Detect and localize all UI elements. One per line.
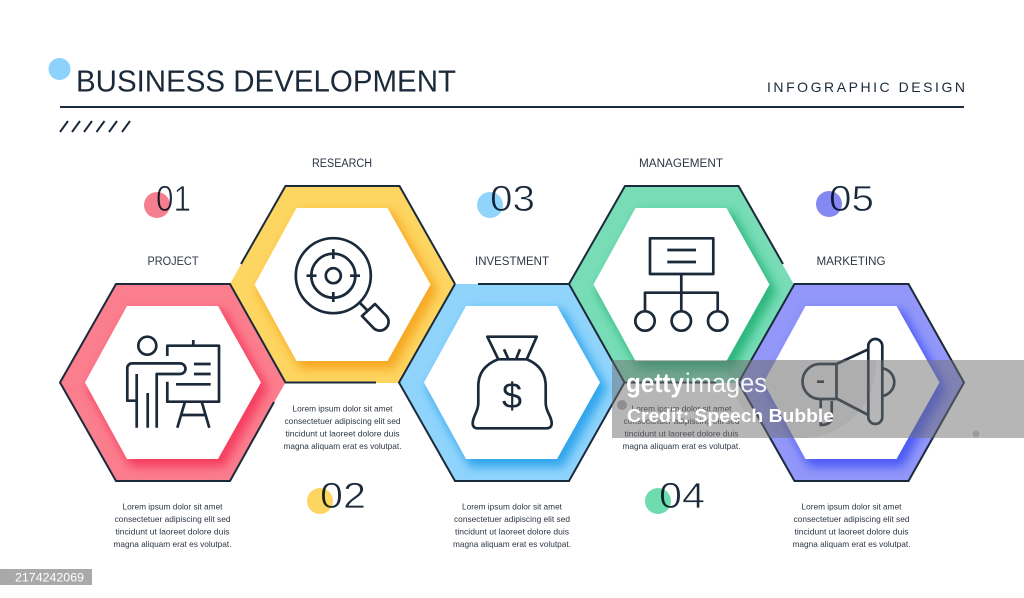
icon: presenter with board (127, 337, 219, 428)
label: project: PROJECT (148, 256, 198, 268)
text block: management: consectetuer adipiscing elit sed (624, 416, 740, 426)
icon: megaphone (802, 339, 894, 425)
text block: research: Lorem ipsum dolor sit amet (292, 404, 393, 414)
text block: marketing: magna aliquam erat es volutpat. (792, 539, 910, 549)
text block: research: consectetuer adipiscing elit sed (284, 416, 401, 426)
watermark band: images (685, 368, 767, 398)
watermark band (612, 360, 1024, 438)
panel: investment hexagon (399, 284, 624, 481)
text block: investment: magna aliquam erat es volutpat. (453, 539, 571, 549)
text block: project: tincidunt ut laoreet dolore duis (116, 526, 230, 536)
number 03 (477, 178, 535, 219)
image id badge (0, 569, 92, 585)
icon: money bag: $ (502, 375, 522, 416)
icon: org chart (635, 238, 727, 331)
number 05 (816, 178, 874, 219)
icon: target magnifier (296, 238, 389, 331)
panel: project hexagon (60, 284, 286, 481)
number 04: 04 (659, 475, 705, 516)
text block: project: consectetuer adipiscing elit sed (114, 514, 231, 524)
text block: investment (453, 502, 571, 549)
text block: investment: tincidunt ut laoreet dolore duis (455, 526, 569, 536)
panel: management hexagon (568, 186, 794, 383)
text block: research: tincidunt ut laoreet dolore duis (286, 428, 400, 438)
text block: investment: consectetuer adipiscing elit sed (454, 514, 570, 524)
text block: management: Lorem ipsum dolor sit amet (632, 404, 732, 414)
number 03: 03 (490, 178, 535, 219)
label: research: RESEARCH (312, 158, 372, 170)
panel: marketing hexagon (738, 284, 964, 481)
text block: marketing: tincidunt ut laoreet dolore duis (794, 526, 908, 536)
label: management: MANAGEMENT (639, 158, 723, 170)
watermark band: getty (626, 368, 684, 398)
text block: management (622, 404, 740, 451)
text block: project (114, 502, 232, 549)
label: marketing: MARKETING (816, 256, 886, 268)
text block: marketing: consectetuer adipiscing elit sed (794, 514, 910, 524)
number 04 (645, 475, 705, 516)
number 05: 05 (829, 178, 874, 219)
text block: research (284, 404, 402, 451)
title: BUSINESS DEVELOPMENT (76, 64, 456, 98)
label: investment: INVESTMENT (475, 256, 549, 268)
image id badge: 2174242069 (15, 570, 84, 584)
number 02 (307, 475, 366, 516)
number 01 (144, 178, 191, 219)
icon: money bag (473, 337, 552, 428)
number 01: 01 (156, 178, 191, 219)
text block: management: tincidunt ut laoreet dolore duis (624, 428, 738, 438)
hexagon outlines (60, 186, 964, 481)
text block: research: magna aliquam erat es volutpat. (284, 441, 402, 451)
watermark band: Credit: Speech Bubble (627, 406, 834, 426)
title dot (48, 58, 70, 80)
text block: management: magna aliquam erat es volutpat. (622, 441, 740, 451)
text block: project: magna aliquam erat es volutpat. (114, 539, 232, 549)
number 02: 02 (320, 475, 366, 516)
text block: marketing (792, 502, 910, 549)
panel: research hexagon (230, 186, 455, 383)
text block: marketing: Lorem ipsum dolor sit amet (802, 502, 902, 512)
subtitle: INFOGRAPHIC DESIGN (767, 79, 965, 95)
text block: investment: Lorem ipsum dolor sit amet (462, 502, 563, 512)
text block: project: Lorem ipsum dolor sit amet (122, 502, 223, 512)
